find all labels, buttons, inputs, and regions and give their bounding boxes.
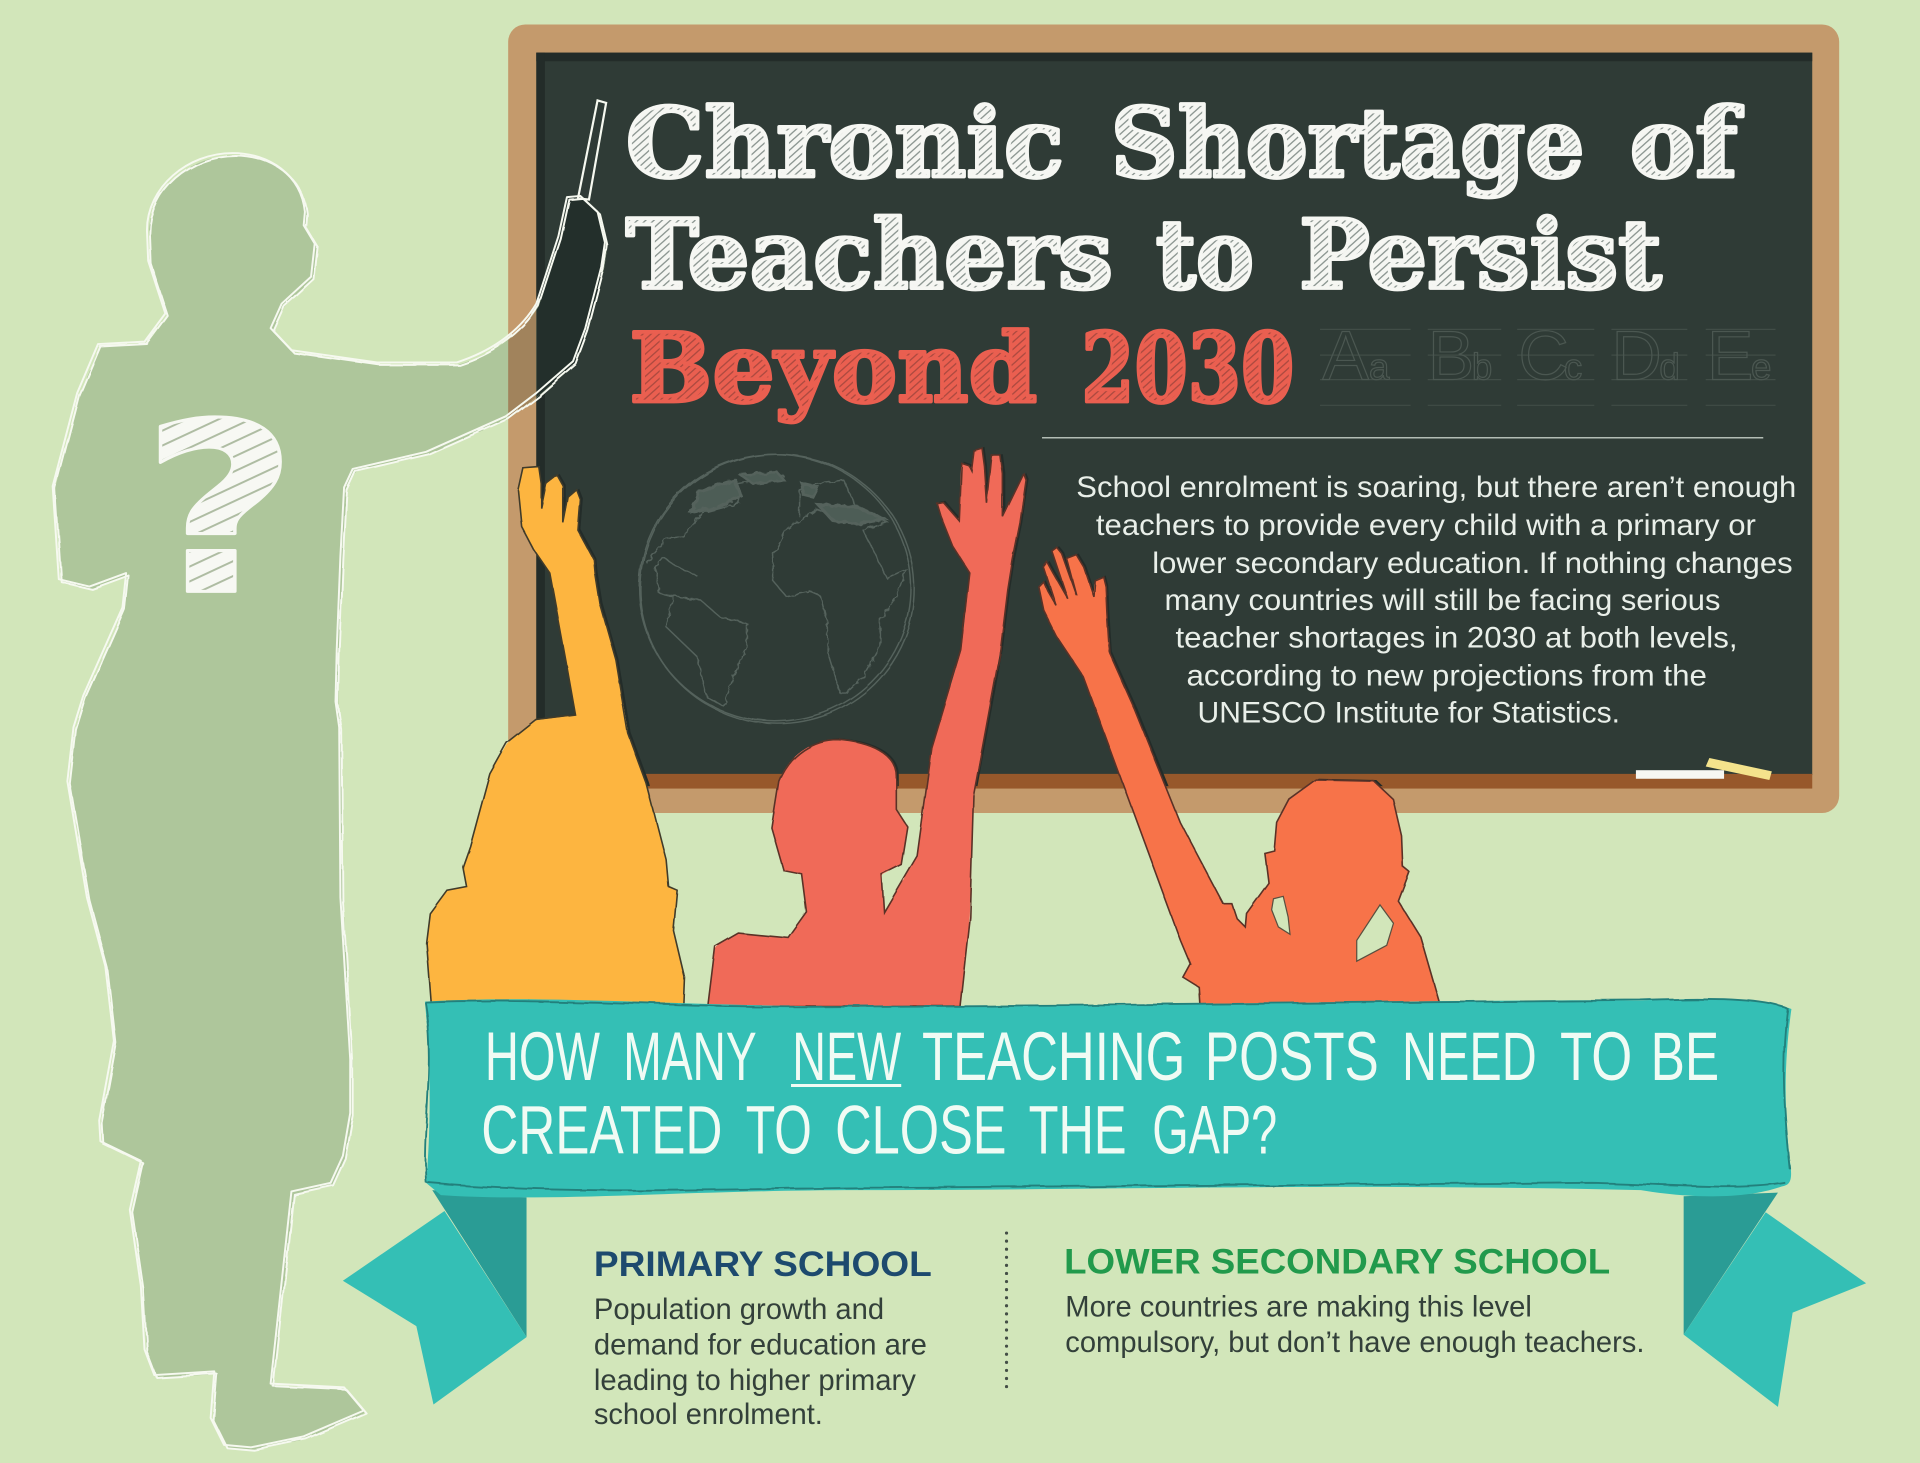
banner heading: GAP? [1152,1091,1277,1168]
banner heading: NEED [1402,1018,1537,1095]
icon: globe [639,454,915,724]
blackboard surface [536,53,1812,775]
teacher body [55,156,607,1450]
handwriting alphabet guide: Bb [1428,317,1492,395]
kid: orange [1038,546,1444,1007]
banner [425,999,1791,1197]
banner heading: TEACHING [922,1018,1185,1095]
text: primary school: Population growth and [594,1293,884,1326]
title [626,86,1744,425]
title: Beyond [629,312,1037,425]
chalk tray [536,774,1812,789]
block: primary school [594,1244,932,1431]
pointer [578,100,606,200]
kid: yellow [426,465,687,1007]
intro text: School enrolment is soaring, but there aren’t enough [1076,471,1796,504]
intro text: lower secondary education. If nothing changes [1152,547,1793,580]
title: 2030 [1081,312,1294,425]
banner heading: POSTS [1205,1018,1379,1095]
dotted separator [1005,1233,1008,1392]
arm over frame [508,310,536,417]
intro text: teacher shortages in 2030 at both levels, [1176,622,1738,655]
text: lower secondary school [1065,1290,1644,1359]
title: of [1630,86,1744,199]
handwriting alphabet guide: Dd [1611,317,1680,395]
banner heading: HOW [485,1018,600,1095]
intro text: according to new projections from the [1187,660,1707,693]
handwriting alphabet guide: Ee [1707,317,1771,395]
banner heading: CLOSE [835,1091,1007,1168]
title: Persist [1299,198,1662,311]
arm over board [536,200,606,398]
chalk pieces [1636,758,1772,780]
teacher sketch outline [53,153,607,1450]
heading: primary school: PRIMARY SCHOOL [594,1244,932,1284]
banner heading: TO [746,1091,812,1168]
banner heading [481,1018,1719,1168]
title: Shortage [1111,86,1584,199]
handwriting alphabet guide: Aa [1322,317,1390,395]
icon: question mark: ? [142,374,298,647]
intro text: teachers to provide every child with a primary or [1096,509,1756,542]
text: primary school: leading to higher primary [594,1364,916,1397]
banner heading: BE [1651,1018,1719,1095]
title: to [1156,198,1254,311]
title: Chronic [626,86,1064,199]
ribbon tail: right [1684,1193,1866,1407]
heading: lower secondary school: LOWER SECONDARY SCHOOL [1064,1241,1610,1281]
text: primary school: school enrolment. [594,1398,823,1431]
banner sketch outline [425,999,1790,1190]
ribbon tail: left [343,1190,527,1404]
text: primary school [594,1293,927,1431]
banner heading: NEW [792,1018,901,1095]
intro text: UNESCO Institute for Statistics. [1198,696,1620,729]
text: primary school: demand for education are [594,1328,927,1361]
blackboard frame [508,24,1839,813]
banner ribbon [425,999,1791,1197]
teacher silhouette [53,100,607,1450]
kid: red [708,447,1029,1007]
banner heading: CREATED [481,1091,722,1168]
title: Teachers [626,198,1113,311]
block: lower secondary school [1064,1241,1644,1359]
text: lower secondary school: compulsory, but don’t have enough teachers. [1065,1326,1644,1359]
intro text [1076,471,1796,729]
banner heading: MANY [623,1018,757,1095]
intro text: many countries will still be facing serious [1164,584,1720,617]
handwriting alphabet guide [1320,317,1775,405]
banner heading: THE [1029,1091,1127,1168]
banner heading: TO [1560,1018,1632,1095]
handwriting alphabet guide: Cc [1518,317,1582,395]
text: lower secondary school: More countries are making this level [1065,1290,1532,1323]
panel: blackboard [508,24,1839,813]
divider [1042,437,1763,439]
